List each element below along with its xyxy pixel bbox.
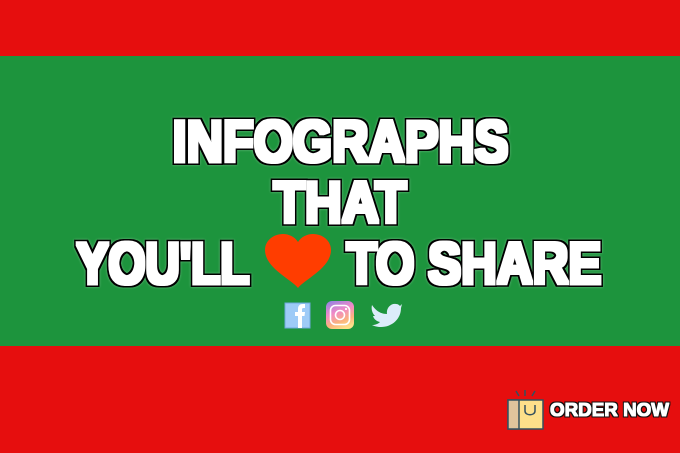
heading line 1: INFOGRAPHS bbox=[173, 109, 508, 174]
bottom red band bbox=[0, 346, 680, 453]
icon: shopping bag bbox=[508, 390, 543, 429]
icon: facebook bbox=[285, 303, 310, 328]
green centre panel bbox=[0, 56, 680, 346]
icon: instagram bbox=[326, 301, 354, 329]
top red band bbox=[0, 0, 680, 56]
icon: twitter bird bbox=[372, 304, 402, 327]
heading line 2: THAT bbox=[274, 170, 406, 235]
heading line 3: you'll: YOU'LL bbox=[77, 231, 249, 296]
icon: heart bbox=[265, 234, 331, 288]
label: order now: ORDER NOW bbox=[550, 399, 670, 420]
heading line 3: to share: TO SHARE bbox=[347, 231, 601, 296]
order now button bbox=[508, 390, 670, 429]
